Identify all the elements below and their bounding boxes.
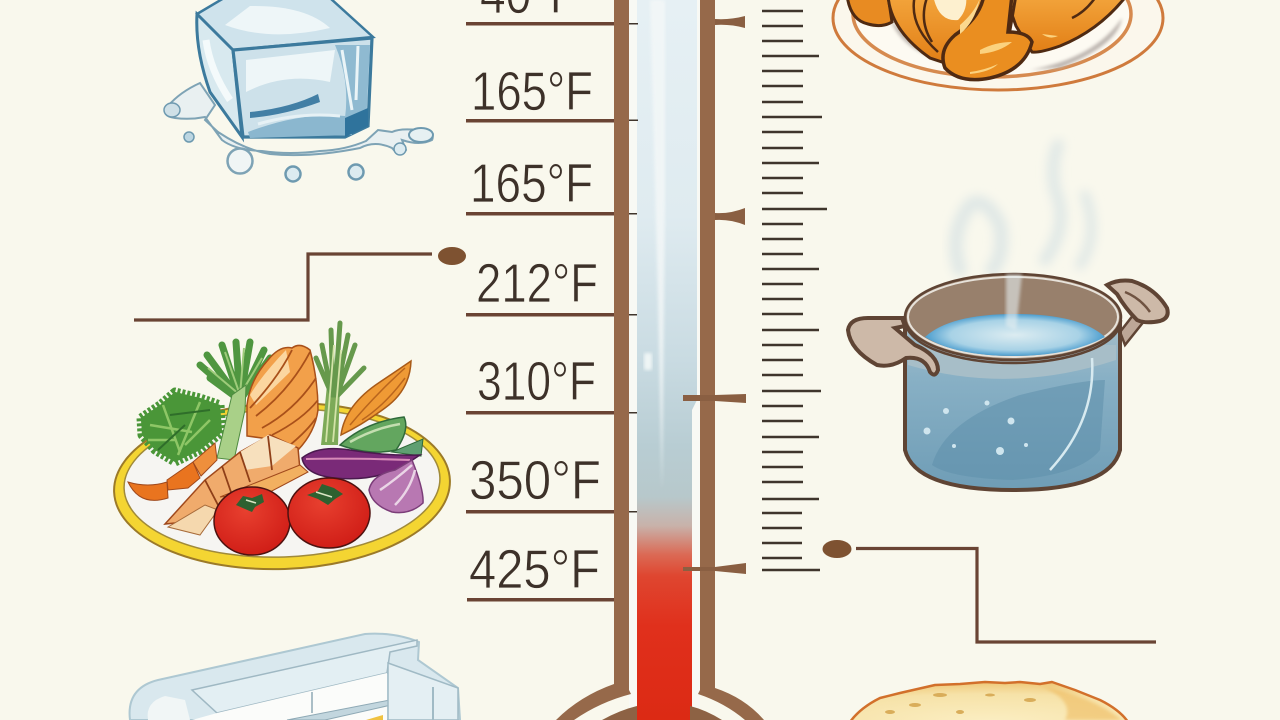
pot rim and interior (905, 274, 1121, 360)
icon: refrigerator (130, 634, 460, 720)
glass tube (629, 0, 700, 720)
label 350°F: 350°F (469, 449, 601, 511)
shelf (287, 698, 400, 720)
celery (200, 342, 270, 460)
plate shadow (1030, 18, 1122, 70)
column highlight (650, 0, 665, 490)
label 165°F: 165°F (471, 60, 593, 122)
label 310°F: 310°F (477, 350, 596, 412)
green leek (316, 323, 364, 445)
water droplets (228, 148, 252, 174)
meltwater puddle (165, 83, 433, 155)
right pegs (683, 16, 746, 574)
ice left face (197, 14, 242, 137)
steam (956, 145, 1091, 270)
onion (369, 460, 423, 513)
eggplant (302, 449, 420, 479)
ice top face (197, 0, 373, 50)
lettuce (141, 392, 222, 462)
bread spots (885, 693, 1036, 714)
left scale lines (466, 22, 638, 602)
chicken leg (943, 0, 1032, 80)
temperature labels (469, 0, 601, 600)
orange squash fan (247, 345, 318, 450)
lower water shading (932, 380, 1105, 480)
right tick scale (762, 11, 827, 570)
label 165°F second: 165°F (470, 152, 593, 214)
orange carrot (341, 361, 411, 435)
tomatoes (214, 478, 370, 555)
bread crust (850, 682, 1128, 720)
left callout (134, 247, 466, 320)
temperature column (637, 0, 697, 720)
fridge upper panel (192, 640, 417, 713)
label 212°F: 212°F (476, 252, 598, 314)
pot body (905, 318, 1120, 490)
icon: boiling pot (848, 145, 1168, 490)
right callout (822, 540, 1156, 642)
right handle (1120, 314, 1145, 345)
icon: flatbread (850, 682, 1128, 720)
chicken left wing (847, 0, 892, 26)
fridge inner (192, 673, 387, 720)
chicken centre (888, 0, 1016, 63)
ice front face (233, 38, 372, 137)
label 425°F: 425°F (469, 538, 600, 600)
fridge door (388, 663, 458, 720)
thermometer (556, 0, 764, 720)
icon: vegetable plate (111, 323, 453, 575)
thermometer walls (556, 0, 631, 720)
cucumber (340, 417, 406, 452)
fridge interior food (366, 715, 383, 720)
plate (111, 397, 453, 575)
bubbles (924, 400, 1028, 455)
fridge shell (130, 634, 460, 720)
bulb inner wall (602, 706, 637, 720)
chicken right body (1005, 0, 1127, 52)
boiling water (925, 314, 1105, 356)
browned edge (1040, 686, 1122, 720)
icon: roast chicken on plate (833, 0, 1163, 90)
shrimp carrots (128, 435, 308, 535)
left handle (848, 318, 938, 375)
icon: melting ice cube (164, 0, 433, 182)
plate rings (833, 0, 1163, 90)
